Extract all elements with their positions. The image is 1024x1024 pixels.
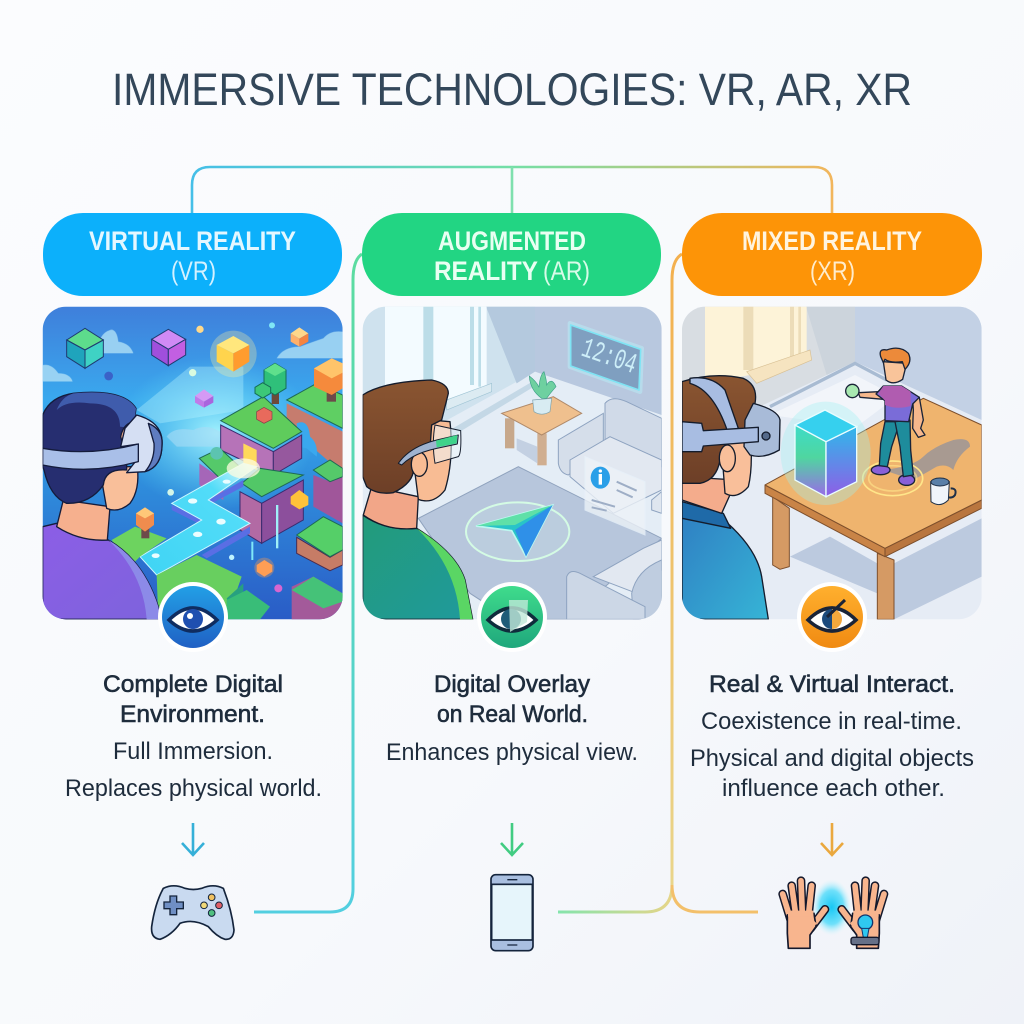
- text: VR description: Environment.: [120, 701, 265, 728]
- person: XR user: [682, 376, 780, 619]
- floating cubes: [67, 328, 186, 368]
- person: AR user: [363, 380, 473, 619]
- person shadow on table: [883, 439, 970, 480]
- text: XR description: influence each other.: [722, 775, 945, 802]
- text: AR description: [386, 671, 638, 766]
- glowing path: [172, 505, 200, 522]
- connector: AR to XR: [558, 254, 758, 912]
- icon: XR eye badge: [797, 582, 867, 652]
- text: AR description: Digital Overlay: [434, 671, 590, 698]
- AR clock: [570, 323, 642, 392]
- hologram cube: [781, 402, 871, 505]
- grass platforms: [112, 526, 166, 562]
- text: AR description: Enhances physical view.: [386, 739, 638, 766]
- text: VR description: [65, 671, 322, 802]
- text: AR description: on Real World.: [437, 701, 588, 728]
- table: [765, 398, 982, 619]
- icon: hands with sensor: [783, 879, 884, 948]
- person: VR user: [43, 392, 162, 619]
- icon: smartphone: [491, 875, 533, 951]
- upper island: [221, 425, 273, 475]
- ripple rings: [863, 461, 923, 496]
- tree: [272, 393, 279, 404]
- text: XR description: [690, 671, 974, 802]
- arrow: VR down: [182, 823, 204, 855]
- text: VR description: Complete Digital: [103, 671, 283, 698]
- text: VR description: Full Immersion.: [113, 738, 273, 765]
- side table with plant: [502, 372, 582, 465]
- text: XR description: Physical and digital objects: [690, 745, 974, 772]
- title: IMMERSIVE TECHNOLOGIES: VR, AR, XR: [112, 64, 912, 115]
- virtual character: [846, 348, 925, 485]
- header: Augmented Reality: AUGMENTED: [438, 226, 586, 256]
- AR navigation arrow: [466, 502, 569, 561]
- header: Augmented Reality: (AR): [543, 256, 590, 286]
- header: Mixed Reality: [682, 213, 982, 296]
- header: Mixed Reality: MIXED REALITY: [742, 226, 922, 256]
- icon: game controller: [152, 886, 234, 939]
- arrow: XR down: [821, 823, 843, 855]
- AR clock: 12:04: [577, 334, 640, 382]
- clouds: [43, 330, 343, 447]
- sofa: [558, 399, 662, 513]
- orb details: [291, 490, 308, 509]
- panel: XR illustration: [682, 307, 982, 619]
- icon: AR eye badge: [477, 582, 547, 652]
- text: VR description: Replaces physical world.: [65, 775, 322, 802]
- header: Mixed Reality: (XR): [810, 256, 855, 286]
- header: Augmented Reality: [362, 213, 661, 296]
- connector: VR to AR: [254, 254, 362, 912]
- window: [385, 306, 487, 400]
- icon: VR eye badge: [158, 582, 228, 652]
- connector: top bracket linking the three headers: [192, 167, 832, 213]
- header: Virtual Reality: VIRTUAL REALITY: [89, 226, 296, 256]
- left and lower island: [199, 463, 223, 500]
- rug: [418, 467, 662, 619]
- header: Virtual Reality: [43, 213, 342, 296]
- window warm: [705, 307, 807, 383]
- header: Virtual Reality: (VR): [171, 256, 216, 286]
- header: Augmented Reality: REALITY: [434, 256, 538, 286]
- arrow: AR down: [501, 823, 523, 855]
- mug: [931, 478, 956, 505]
- text: XR description: Coexistence in real-time.: [701, 708, 962, 735]
- text: XR description: Real & Virtual Interact.: [709, 671, 955, 698]
- panel: AR illustration: [363, 307, 662, 619]
- right island: [287, 403, 343, 473]
- AR info card: [585, 457, 645, 535]
- panel: VR illustration: [43, 307, 343, 619]
- sofa chair foreground: [567, 540, 662, 619]
- floor shadow: [790, 537, 877, 593]
